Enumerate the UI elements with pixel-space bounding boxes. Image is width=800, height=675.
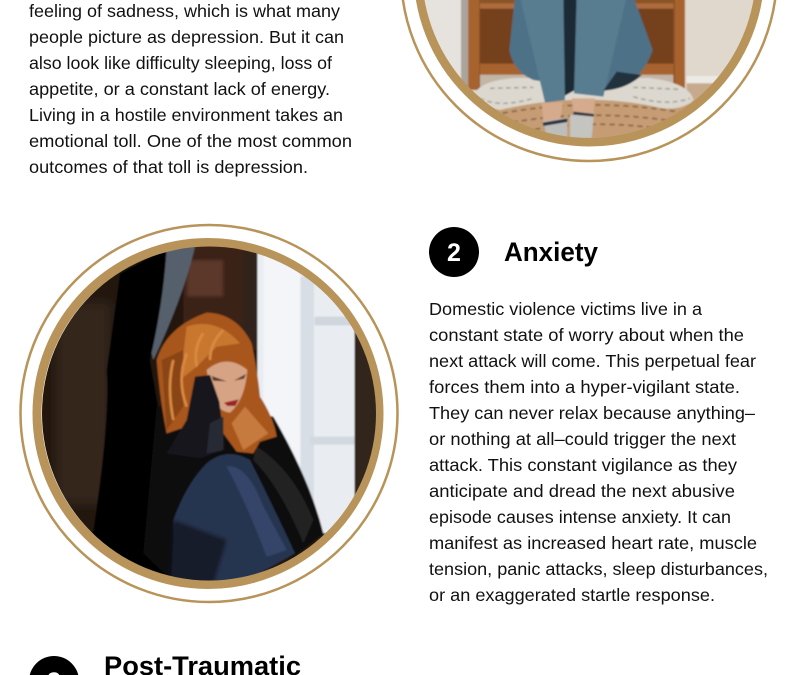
heading: Anxiety: Anxiety — [504, 237, 598, 267]
text block: depression description — [29, 1, 352, 177]
text block: depression description: outcomes of that toll is depression. — [29, 157, 308, 177]
photo circle: red-haired woman by window — [20, 225, 398, 602]
text block: anxiety description: Domestic violence victims live in a — [429, 299, 702, 319]
number badge 3 — [29, 656, 79, 675]
face — [207, 362, 247, 413]
pouf — [494, 99, 691, 138]
text block: anxiety description: next attack will come. This perpetual fear — [429, 351, 756, 371]
text block: anxiety description: anticipate and dread the next abusive — [429, 481, 735, 501]
text block: anxiety description — [429, 299, 768, 605]
text block: anxiety description: or nothing at all–could trigger the next — [429, 429, 736, 449]
jacket — [143, 407, 323, 585]
text block: anxiety description: manifest as increased heart rate, muscle — [429, 533, 757, 553]
text block: anxiety description: They can never relax because anything– — [429, 403, 755, 423]
sleeve and hand — [167, 375, 223, 458]
text block: depression description: people picture as depression. But it can — [29, 27, 344, 47]
curtain — [150, 247, 196, 360]
window — [257, 250, 355, 533]
hair — [157, 313, 277, 453]
text block: anxiety description: forces them into a hyper-vigilant state. — [429, 377, 740, 397]
text block: anxiety description: tension, panic attacks, sleep disturbances, — [429, 559, 768, 579]
legs — [542, 102, 563, 123]
photo circle: person sitting on woven pouf — [400, 0, 800, 161]
text block: anxiety description: or an exaggerated startle response. — [429, 585, 715, 605]
text block: anxiety description: constant state of worry about when the — [429, 325, 744, 345]
jeans — [509, 0, 653, 91]
jeans — [173, 454, 295, 585]
text block: anxiety description: episode causes intense anxiety. It can — [429, 507, 731, 527]
text block: depression description: Living in a hostile environment takes an — [29, 105, 343, 125]
text block: anxiety description: attack. This constant vigilance as they — [429, 455, 737, 475]
text block: depression description: also look like difficulty sleeping, loss of — [29, 53, 332, 73]
number badge 2 — [429, 227, 479, 277]
text block: depression description: feeling of sadness, which is what many — [29, 1, 340, 21]
text block: depression description: appetite, or a constant lack of energy. — [29, 79, 330, 99]
text block: depression description: emotional toll. One of the most common — [29, 131, 352, 151]
socks — [543, 117, 567, 137]
number badge 2: 2 — [447, 239, 461, 267]
